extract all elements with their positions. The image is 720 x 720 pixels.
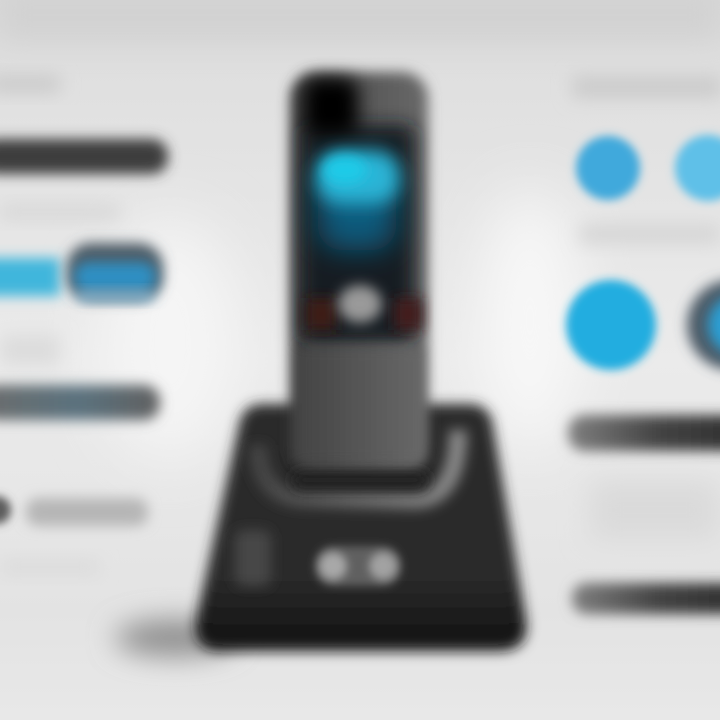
large cyan circle	[566, 280, 656, 370]
grey bar 2	[0, 385, 160, 420]
keypad	[298, 346, 422, 464]
floor shadow	[115, 620, 235, 656]
panel: cordless phone	[115, 72, 526, 656]
faint heading top left	[0, 76, 60, 92]
dark bar 1	[0, 139, 168, 174]
dark bar right 2	[572, 583, 720, 614]
small dark icon	[0, 496, 11, 524]
cyan bar	[0, 258, 60, 296]
dark bar right 1	[568, 415, 720, 451]
cradle ring	[258, 430, 458, 500]
panel: left column	[0, 76, 168, 574]
blue circle row 1 left	[576, 136, 640, 200]
light grey bar 3	[26, 498, 148, 526]
faint text rows	[590, 480, 720, 540]
panel: right column	[566, 76, 720, 614]
faint heading top right	[572, 76, 720, 98]
base station	[196, 404, 526, 651]
handset	[290, 72, 428, 490]
faint text row	[0, 205, 120, 219]
blue pill button	[67, 243, 163, 301]
dark-ringed blue circle	[687, 280, 720, 370]
centre buttons	[315, 546, 401, 586]
screen	[302, 78, 414, 343]
left button block	[235, 530, 271, 586]
blue circle row 1 right	[675, 135, 720, 201]
faint text row	[0, 335, 60, 365]
nav row	[306, 285, 422, 330]
faint text row	[0, 560, 100, 574]
cradle slot shadow	[292, 470, 428, 490]
faint text row	[580, 225, 720, 243]
